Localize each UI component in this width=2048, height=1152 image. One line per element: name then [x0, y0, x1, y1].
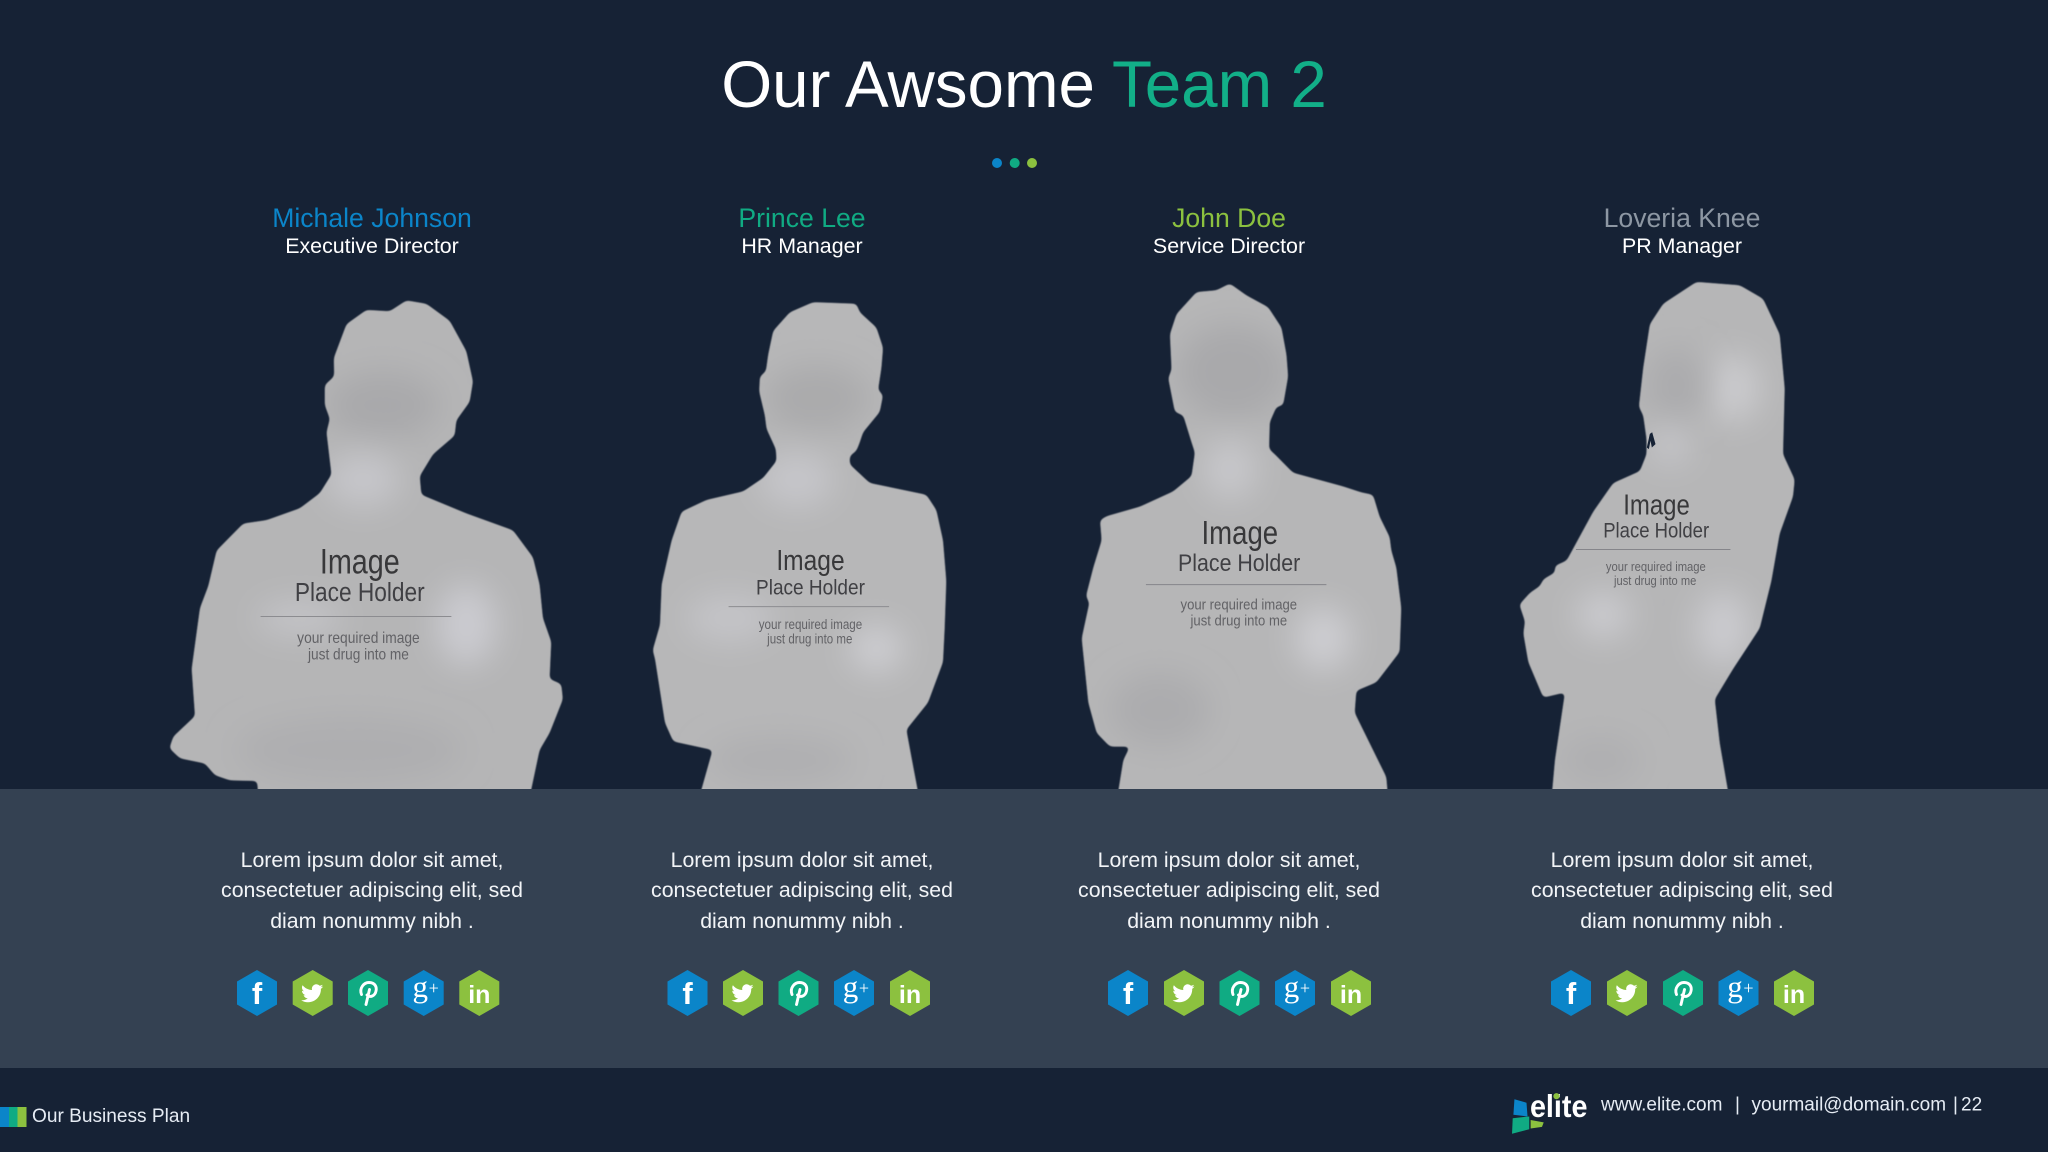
image placeholder: member 4 silhouette: [1520, 282, 1796, 789]
icon: linkedin: [1331, 970, 1371, 1016]
member 2 description: Lorem ipsum dolor sit amet,: [671, 848, 933, 872]
placeholder text: your required image: [1181, 597, 1297, 614]
icon: twitter: [293, 970, 333, 1016]
icon: facebook: [237, 970, 277, 1016]
placeholder text: your required image: [297, 630, 420, 647]
member 2 heading: [738, 203, 866, 258]
member 1 social icons: [237, 969, 499, 1016]
footer: contact and page number: |: [1735, 1094, 1740, 1116]
member 1 description: Lorem ipsum dolor sit amet,: [241, 848, 503, 872]
icon: facebook: [1108, 970, 1148, 1016]
icon: twitter: [723, 970, 763, 1016]
footer: contact and page number: |: [1953, 1094, 1958, 1116]
title: Our Awsome Team 2: [721, 48, 1327, 121]
member 4 heading: PR Manager: [1622, 234, 1742, 258]
placeholder text: Place Holder: [1603, 520, 1709, 543]
member 4 heading: Loveria Knee: [1604, 203, 1760, 233]
earring detail: [1647, 432, 1656, 449]
member 3 description: [1078, 848, 1380, 933]
member 4 description: consectetuer adipiscing elit, sed: [1531, 878, 1833, 902]
placeholder text: just drug into me: [307, 647, 409, 664]
member 4 description: [1531, 848, 1833, 933]
icon: facebook: [668, 970, 708, 1016]
placeholder text: Image: [776, 545, 845, 577]
member 4 description: Lorem ipsum dolor sit amet,: [1551, 848, 1813, 872]
placeholder text: Image: [1202, 514, 1278, 551]
footer: section name: Our Business Plan: [32, 1106, 190, 1127]
footer: elite logo: [1512, 1088, 1587, 1134]
placeholder text: [1146, 514, 1326, 630]
footer: contact and page number: yourmail@domain.com: [1752, 1094, 1946, 1116]
icon: twitter: [1164, 970, 1204, 1016]
member 4 description: diam nonummy nibh .: [1580, 909, 1784, 933]
member 1 description: diam nonummy nibh .: [270, 909, 474, 933]
member 3 description: Lorem ipsum dolor sit amet,: [1098, 848, 1360, 872]
placeholder text: [729, 545, 889, 647]
placeholder text: your required image: [1606, 559, 1706, 574]
member 2 description: consectetuer adipiscing elit, sed: [651, 878, 953, 902]
member 3 description: diam nonummy nibh .: [1127, 909, 1331, 933]
placeholder text: Place Holder: [295, 579, 425, 607]
footer: contact and page number: 22: [1961, 1094, 1982, 1116]
placeholder text: [261, 542, 451, 664]
footer: elite logo: elite: [1530, 1088, 1587, 1124]
icon: pinterest: [778, 970, 818, 1016]
icon: google plus: [834, 969, 874, 1016]
placeholder text: Place Holder: [1178, 550, 1300, 577]
placeholder text: Place Holder: [756, 575, 865, 600]
member 3 heading: [1153, 203, 1305, 258]
icon: linkedin: [459, 970, 499, 1016]
member 1 heading: [272, 203, 472, 258]
footer: section marker: [0, 1107, 26, 1127]
icon: google plus: [1275, 969, 1315, 1016]
member 1 description: [221, 848, 523, 933]
member 4 social icons: [1551, 969, 1814, 1016]
image placeholder: member 3 silhouette: [1081, 284, 1402, 789]
member 2 description: diam nonummy nibh .: [700, 909, 904, 933]
member 3 heading: Service Director: [1153, 234, 1305, 258]
member 1 heading: Michale Johnson: [272, 203, 472, 233]
icon: pinterest: [1663, 970, 1703, 1016]
member 2 description: [651, 848, 953, 933]
member 3 social icons: [1108, 969, 1371, 1016]
placeholder text: Image: [1623, 489, 1690, 521]
member 2 social icons: [668, 969, 930, 1016]
placeholder text: just drug into me: [1190, 612, 1287, 630]
member 3 description: consectetuer adipiscing elit, sed: [1078, 878, 1380, 902]
icon: google plus: [1718, 969, 1758, 1016]
icon: twitter: [1607, 970, 1647, 1016]
placeholder text: just drug into me: [1613, 573, 1696, 588]
panel: team info band: [0, 789, 2048, 1068]
placeholder text: Image: [320, 542, 400, 582]
member 3 heading: John Doe: [1172, 203, 1286, 233]
member 1 heading: Executive Director: [285, 234, 459, 258]
icon: google plus: [404, 969, 444, 1016]
decorative dots: [992, 158, 1037, 168]
placeholder text: just drug into me: [766, 631, 853, 647]
icon: facebook: [1551, 970, 1591, 1016]
icon: pinterest: [1220, 970, 1260, 1016]
image placeholder: member 2 silhouette: [652, 302, 947, 789]
placeholder text: [1576, 489, 1730, 588]
placeholder text: your required image: [759, 617, 863, 632]
member 2 heading: HR Manager: [741, 234, 863, 258]
icon: linkedin: [890, 970, 930, 1016]
icon: linkedin: [1774, 970, 1814, 1016]
footer: contact and page number: www.elite.com: [1600, 1094, 1722, 1116]
image placeholder: member 1 silhouette: [170, 300, 564, 789]
member 4 heading: [1604, 203, 1760, 258]
member 1 description: consectetuer adipiscing elit, sed: [221, 878, 523, 902]
icon: pinterest: [348, 970, 388, 1016]
member 2 heading: Prince Lee: [738, 203, 866, 233]
